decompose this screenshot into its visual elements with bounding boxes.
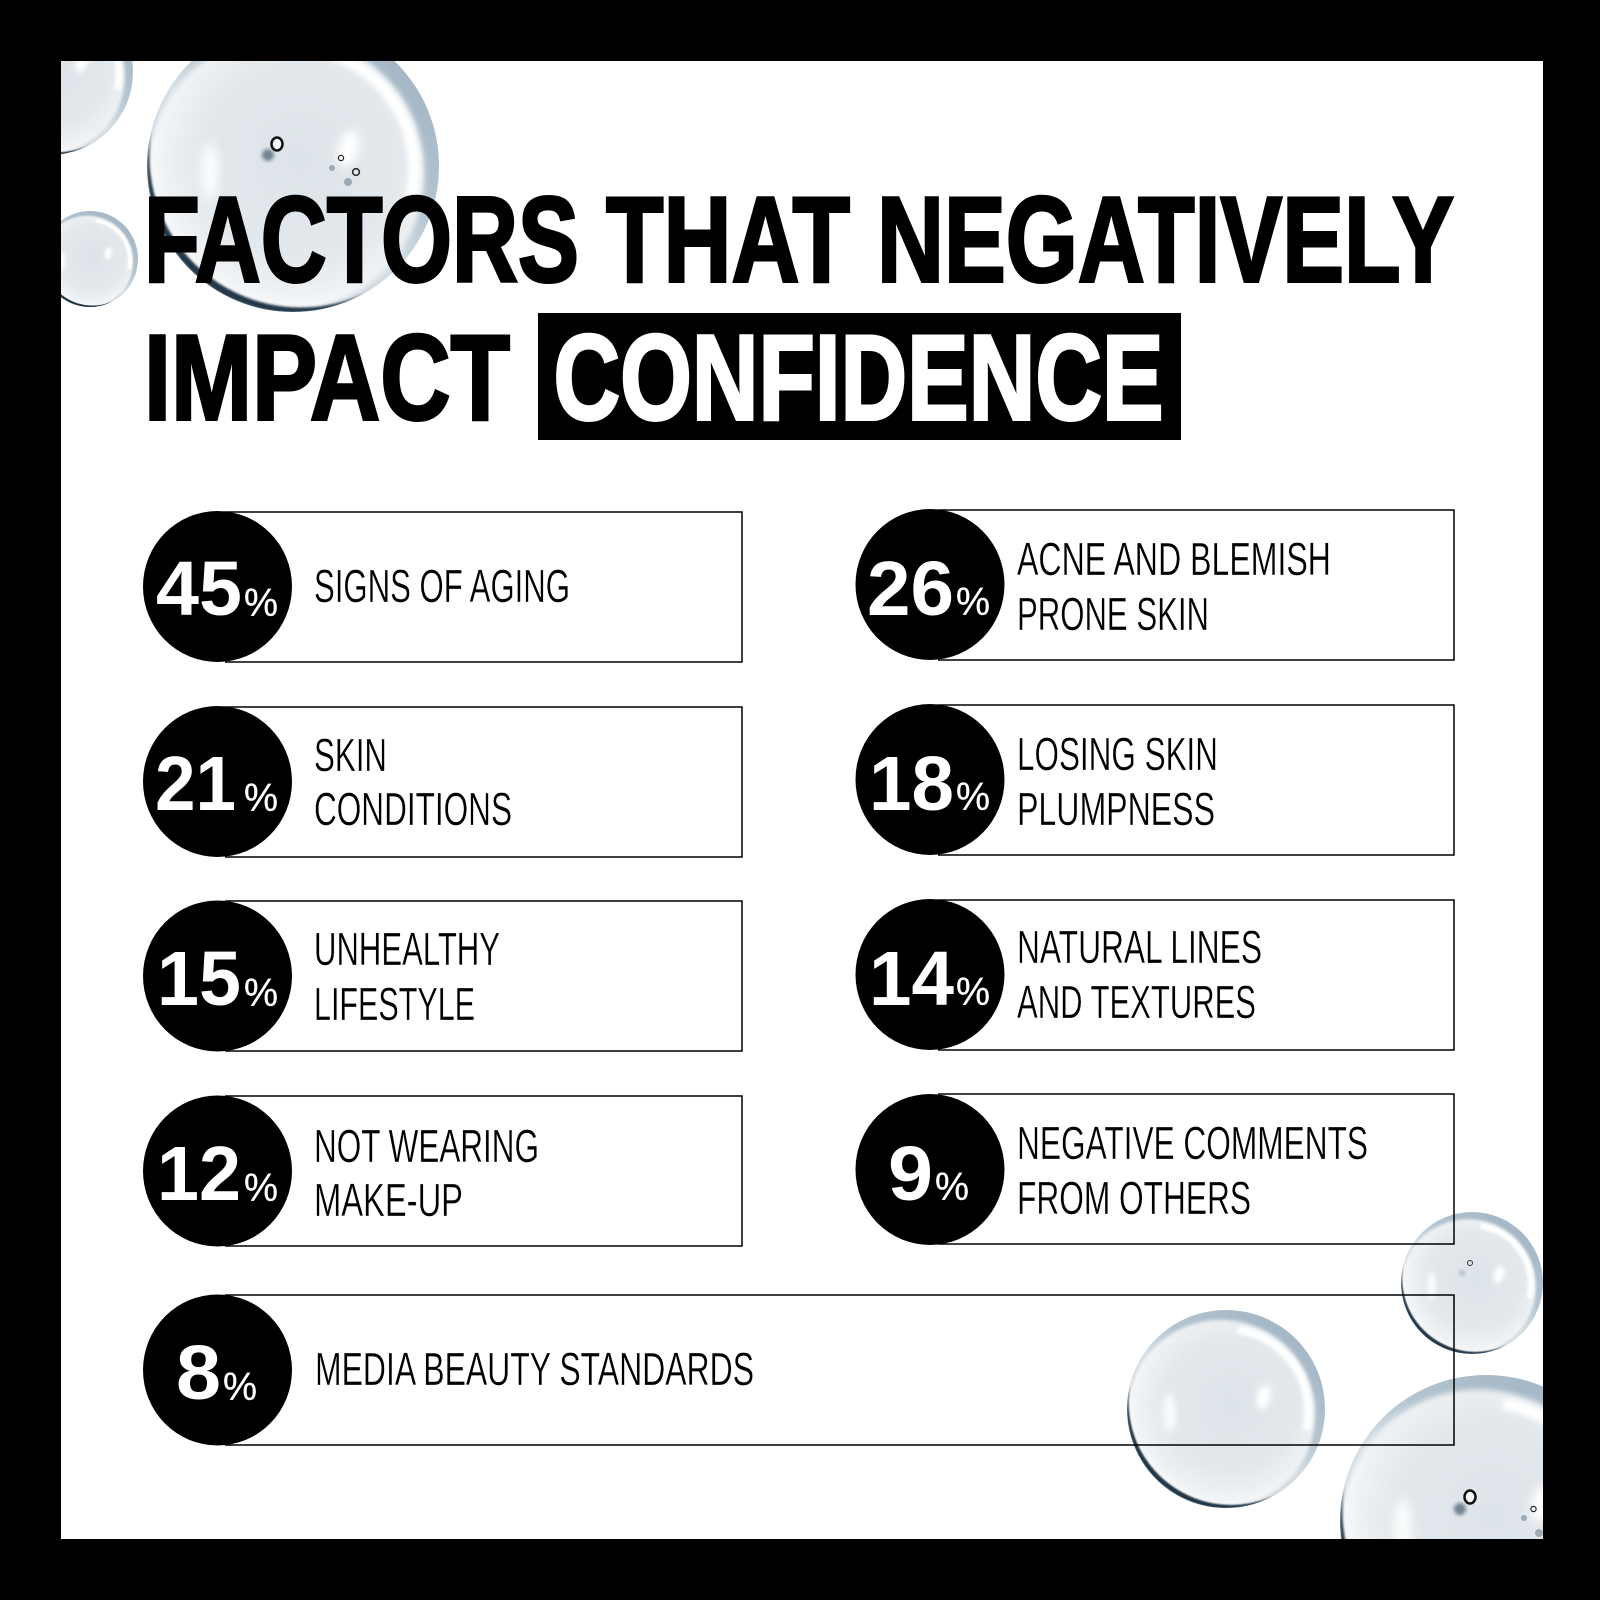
item: 8% media beauty standards: 8 [176, 1330, 221, 1416]
item: 15% unhealthy lifestyle: LIFESTYLE [314, 978, 475, 1030]
item: 26% acne and blemish prone skin: 26 [867, 546, 954, 632]
item: 18% losing skin plumpness: 18 [869, 741, 954, 827]
item: 45% signs of aging: 45 [156, 546, 242, 632]
item: 18% losing skin plumpness: LOSING SKIN [1017, 728, 1218, 780]
item: 15% unhealthy lifestyle: 15 [157, 936, 241, 1022]
item: 9% negative comments from others: % [935, 1166, 969, 1209]
item: 9% negative comments from others: NEGATIVE COMMENTS [1017, 1117, 1368, 1169]
item: 12% not wearing make-up: MAKE-UP [314, 1174, 463, 1226]
title line 1: FACTORS [144, 172, 579, 308]
title line 2: IMPACT [144, 310, 510, 446]
item: 12% not wearing make-up: NOT WEARING [314, 1120, 539, 1172]
item: 26% acne and blemish prone skin: PRONE SKIN [1017, 588, 1209, 640]
item: 14% natural lines and textures: % [956, 971, 990, 1014]
item: 26% acne and blemish prone skin: % [956, 581, 990, 624]
item: 21% skin conditions [143, 706, 742, 857]
item: 26% acne and blemish prone skin [856, 509, 1454, 660]
droplet: middle [1127, 1310, 1325, 1508]
highlight box [538, 313, 1181, 440]
item: 9% negative comments from others [856, 1094, 1454, 1245]
item: 15% unhealthy lifestyle: UNHEALTHY [314, 923, 500, 975]
item: 8% media beauty standards [143, 1294, 1454, 1446]
item: 18% losing skin plumpness: PLUMPNESS [1017, 783, 1215, 835]
item: 12% not wearing make-up: % [244, 1167, 278, 1210]
droplet: large bottom right [1340, 1375, 1543, 1539]
droplet: small left [61, 211, 138, 307]
item: 14% natural lines and textures [856, 899, 1454, 1050]
item: 9% negative comments from others: FROM OTHERS [1017, 1172, 1251, 1224]
item: 26% acne and blemish prone skin: ACNE AND BLEMISH [1017, 533, 1331, 585]
item: 8% media beauty standards: % [223, 1366, 257, 1409]
title line 1: THAT [606, 172, 850, 308]
title [144, 172, 1454, 446]
item: 15% unhealthy lifestyle [143, 900, 742, 1052]
droplet: large top [147, 61, 439, 312]
item: 14% natural lines and textures: 14 [869, 936, 954, 1022]
highlighted word: CONFIDENCE [554, 310, 1164, 446]
item: 12% not wearing make-up [143, 1096, 742, 1246]
item: 21% skin conditions: SKIN [314, 729, 387, 781]
item: 21% skin conditions: % [244, 777, 278, 820]
item: 45% signs of aging: SIGNS OF AGING [314, 560, 570, 612]
item: 21% skin conditions: CONDITIONS [314, 783, 512, 835]
item: 14% natural lines and textures: NATURAL LINES [1017, 921, 1262, 973]
item: 45% signs of aging: % [244, 582, 278, 625]
droplet: small right [1401, 1212, 1543, 1354]
item: 18% losing skin plumpness: % [956, 776, 990, 819]
droplet: top left corner [61, 61, 133, 154]
item: 45% signs of aging [143, 511, 742, 662]
item: 18% losing skin plumpness [856, 704, 1454, 855]
item: 12% not wearing make-up: 12 [157, 1131, 241, 1217]
item: 8% media beauty standards: MEDIA BEAUTY STANDARDS [315, 1343, 754, 1395]
item: 14% natural lines and textures: AND TEXTURES [1017, 976, 1256, 1028]
item: 21% skin conditions: 21 [155, 741, 236, 827]
item: 9% negative comments from others: 9 [888, 1131, 933, 1217]
item: 15% unhealthy lifestyle: % [244, 972, 278, 1015]
